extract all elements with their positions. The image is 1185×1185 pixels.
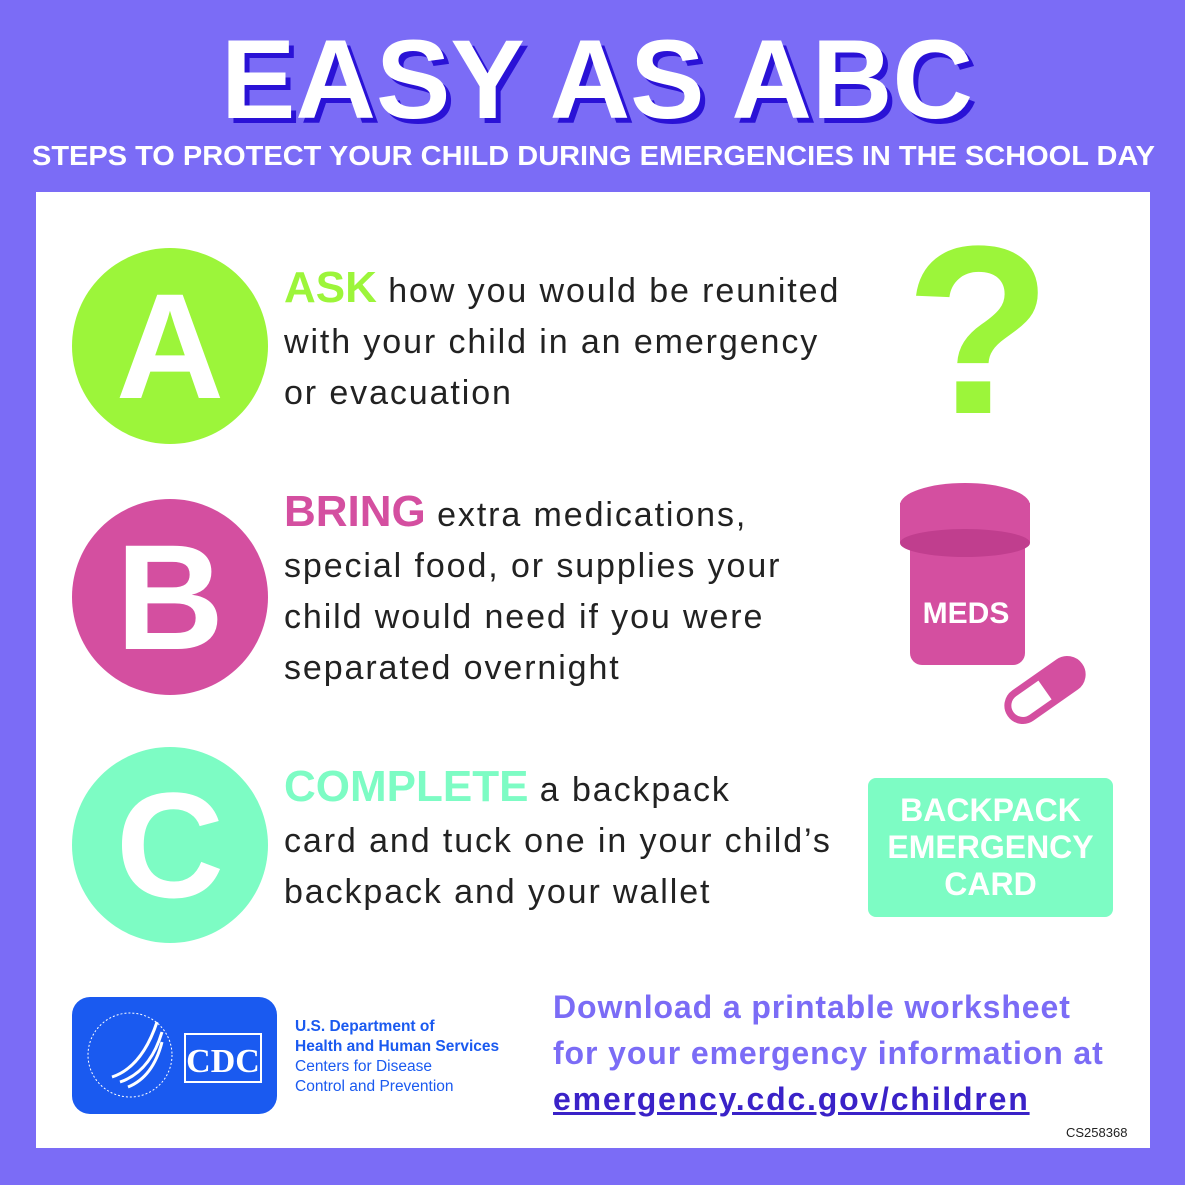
circle A: A	[116, 262, 224, 430]
text C	[284, 762, 832, 911]
text C: card and tuck one in your child’s	[284, 822, 832, 860]
circle B: B	[116, 513, 224, 681]
circle C: C	[116, 761, 224, 929]
download text: for your emergency information at	[553, 1035, 1104, 1071]
logo: HHS CDC: CDC	[186, 1043, 260, 1080]
panel: white card	[36, 192, 1150, 1148]
subtitle: STEPS TO PROTECT YOUR CHILD DURING EMERGENCIES IN THE SCHOOL DAY	[32, 140, 1155, 171]
icon: backpack card: CARD	[944, 866, 1037, 902]
text A: with your child in an emergency	[284, 323, 819, 361]
logo text: Control and Prevention	[295, 1078, 454, 1095]
download text	[553, 989, 1104, 1117]
logo: HHS CDC	[72, 997, 277, 1114]
icon: meds jar	[900, 483, 1086, 724]
icon: backpack card	[868, 778, 1113, 917]
text B: BRING extra medications,	[284, 487, 747, 536]
text B: separated overnight	[284, 649, 621, 687]
logo text	[295, 1018, 499, 1095]
icon: meds jar: MEDS	[923, 597, 1009, 630]
text A	[284, 263, 840, 412]
text A: or evacuation	[284, 374, 513, 412]
download text: emergency.cdc.gov/children	[553, 1081, 1030, 1117]
text A: ASK how you would be reunited	[284, 263, 840, 312]
text B: child would need if you were	[284, 598, 764, 636]
download text: Download a printable worksheet	[553, 989, 1071, 1025]
circle C	[72, 747, 268, 943]
icon: backpack card: EMERGENCY	[887, 829, 1094, 865]
icon: backpack card: BACKPACK	[900, 792, 1081, 828]
logo text: Health and Human Services	[295, 1038, 499, 1055]
text B	[284, 487, 781, 687]
icon: question mark: ?	[905, 196, 1052, 464]
circle A	[72, 248, 268, 444]
logo text: Centers for Disease	[295, 1058, 432, 1075]
logo text: U.S. Department of	[295, 1018, 435, 1035]
text B: special food, or supplies your	[284, 547, 781, 585]
circle B	[72, 499, 268, 695]
text C: backpack and your wallet	[284, 873, 711, 911]
code: CS258368	[1066, 1125, 1127, 1140]
text C: COMPLETE a backpack	[284, 762, 731, 811]
